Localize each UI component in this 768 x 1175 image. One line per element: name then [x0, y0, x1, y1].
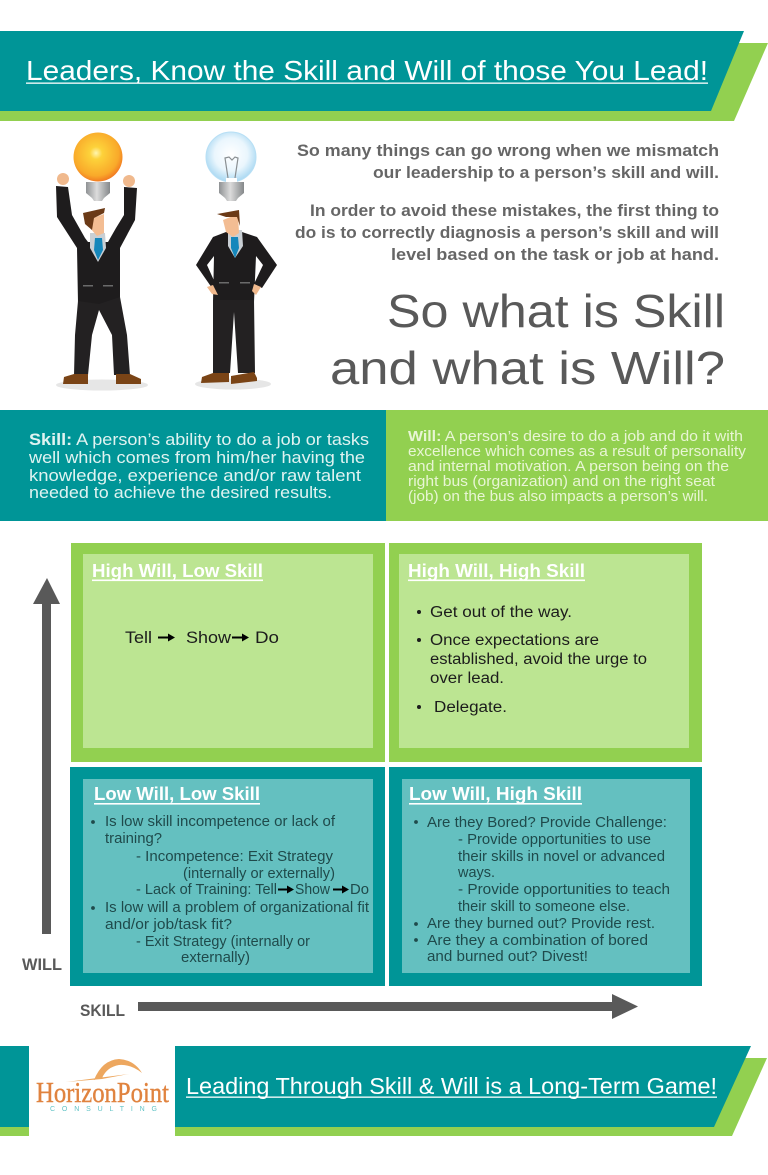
- top banner: [0, 31, 768, 121]
- bullet list: Delegate.: [434, 699, 507, 716]
- panel: skill definition: [0, 410, 386, 521]
- bullet list: ways.: [457, 865, 495, 881]
- bullet list: their skills in novel or advanced: [458, 849, 665, 865]
- bullet list: Are they a combination of bored: [427, 933, 648, 949]
- quadrant: low will, high skill: [389, 767, 702, 986]
- bullet list: externally): [181, 950, 250, 966]
- logo: horizon point consulting: [36, 1059, 169, 1113]
- panel: skill definition: Skill: A person’s ability to do a job or tasks: [29, 430, 369, 449]
- intro text: So many things can go wrong when we mismatch: [297, 141, 719, 160]
- footer banner: [0, 1040, 767, 1140]
- illustration: thoughtful leader with unlit bulb: [195, 132, 277, 390]
- bullet list: Are they Bored? Provide Challenge:: [427, 815, 667, 831]
- tell show do sequence: Show: [186, 628, 232, 647]
- axis label: skill: SKILL: [80, 1001, 125, 1020]
- quadrant: high will, low skill: [71, 543, 385, 762]
- bullet list: - Provide opportunities to teach: [458, 882, 670, 898]
- quadrant: low will, low skill: [70, 767, 385, 986]
- heading: so what is skill and what is will: [330, 285, 725, 394]
- bullet list: [91, 814, 369, 966]
- bullet list: and burned out? Divest!: [427, 949, 588, 965]
- axis label: will: WILL: [22, 955, 62, 974]
- arrow: skill axis: [138, 994, 638, 1019]
- bullet list: training?: [105, 831, 162, 847]
- logo: horizon point consulting: CONSULTING: [50, 1106, 157, 1113]
- bullet list: [414, 815, 670, 965]
- bullet list: - Provide opportunities to use: [458, 832, 651, 848]
- intro text: our leadership to a person’s skill and will.: [373, 163, 719, 182]
- quadrant heading: High Will, High Skill: [408, 561, 585, 581]
- heading: so what is skill and what is will: and what is Will?: [330, 342, 725, 394]
- bullet list: Do: [350, 882, 369, 898]
- intro text: [295, 141, 719, 264]
- panel: skill definition: knowledge, experience and/or raw talent: [29, 466, 361, 485]
- arrow: will axis: [33, 578, 60, 934]
- quadrant: high will, high skill: [389, 543, 702, 762]
- bullet list: their skill to someone else.: [458, 899, 630, 915]
- bullet list: Get out of the way.: [430, 604, 572, 621]
- bullet list: Is low will a problem of organizational fit: [105, 900, 369, 916]
- bullet list: - Exit Strategy (internally or: [136, 934, 310, 950]
- bullet list: Show: [295, 882, 331, 898]
- panel: will definition: and internal motivation. A person being on the: [408, 459, 729, 475]
- bullet list: Are they burned out? Provide rest.: [427, 916, 655, 932]
- bullet list: established, avoid the urge to: [430, 651, 647, 668]
- panel: skill definition: needed to achieve the desired results.: [29, 483, 332, 502]
- heading: so what is skill and what is will: So what is Skill: [387, 285, 725, 337]
- bullet list: - Incompetence: Exit Strategy: [136, 849, 334, 865]
- title: Leaders, Know the Skill and Will of those You Lead!: [26, 55, 708, 86]
- tell show do sequence: Tell: [125, 628, 152, 647]
- logo: horizon point consulting: HorizonPoint: [36, 1077, 169, 1109]
- tell show do sequence: [125, 628, 279, 647]
- intro text: do is to correctly diagnosis a person’s skill and will: [295, 223, 719, 242]
- footer title: Leading Through Skill & Will is a Long-Term Game!: [186, 1073, 717, 1099]
- panel: will definition: right bus (organization) and on the right seat: [408, 474, 715, 490]
- panel: will definition: excellence which comes as a result of personality: [408, 444, 747, 460]
- quadrant heading: High Will, Low Skill: [92, 561, 263, 581]
- quadrant heading: Low Will, High Skill: [409, 784, 582, 804]
- bullet list: Once expectations are: [430, 632, 599, 649]
- panel: will definition: Will: A person’s desire to do a job and do it with: [408, 429, 743, 445]
- intro text: level based on the task or job at hand.: [391, 245, 719, 264]
- bullet list: [417, 604, 647, 716]
- bullet list: and/or job/task fit?: [105, 917, 232, 933]
- illustration: excited leader with lit bulb: [56, 132, 148, 390]
- bullet list: (internally or externally): [183, 866, 335, 882]
- panel: skill definition: well which comes from him/her having the: [28, 448, 365, 467]
- intro text: In order to avoid these mistakes, the first thing to: [310, 201, 719, 220]
- tell show do sequence: Do: [255, 628, 279, 647]
- bullet list: - Lack of Training: Tell: [136, 882, 277, 898]
- panel: will definition: (job) on the bus also impacts a person’s will.: [408, 489, 708, 505]
- bullet list: Is low skill incompetence or lack of: [105, 814, 336, 830]
- quadrant heading: Low Will, Low Skill: [94, 784, 260, 804]
- bullet list: over lead.: [430, 670, 504, 687]
- panel: will definition: [386, 410, 768, 521]
